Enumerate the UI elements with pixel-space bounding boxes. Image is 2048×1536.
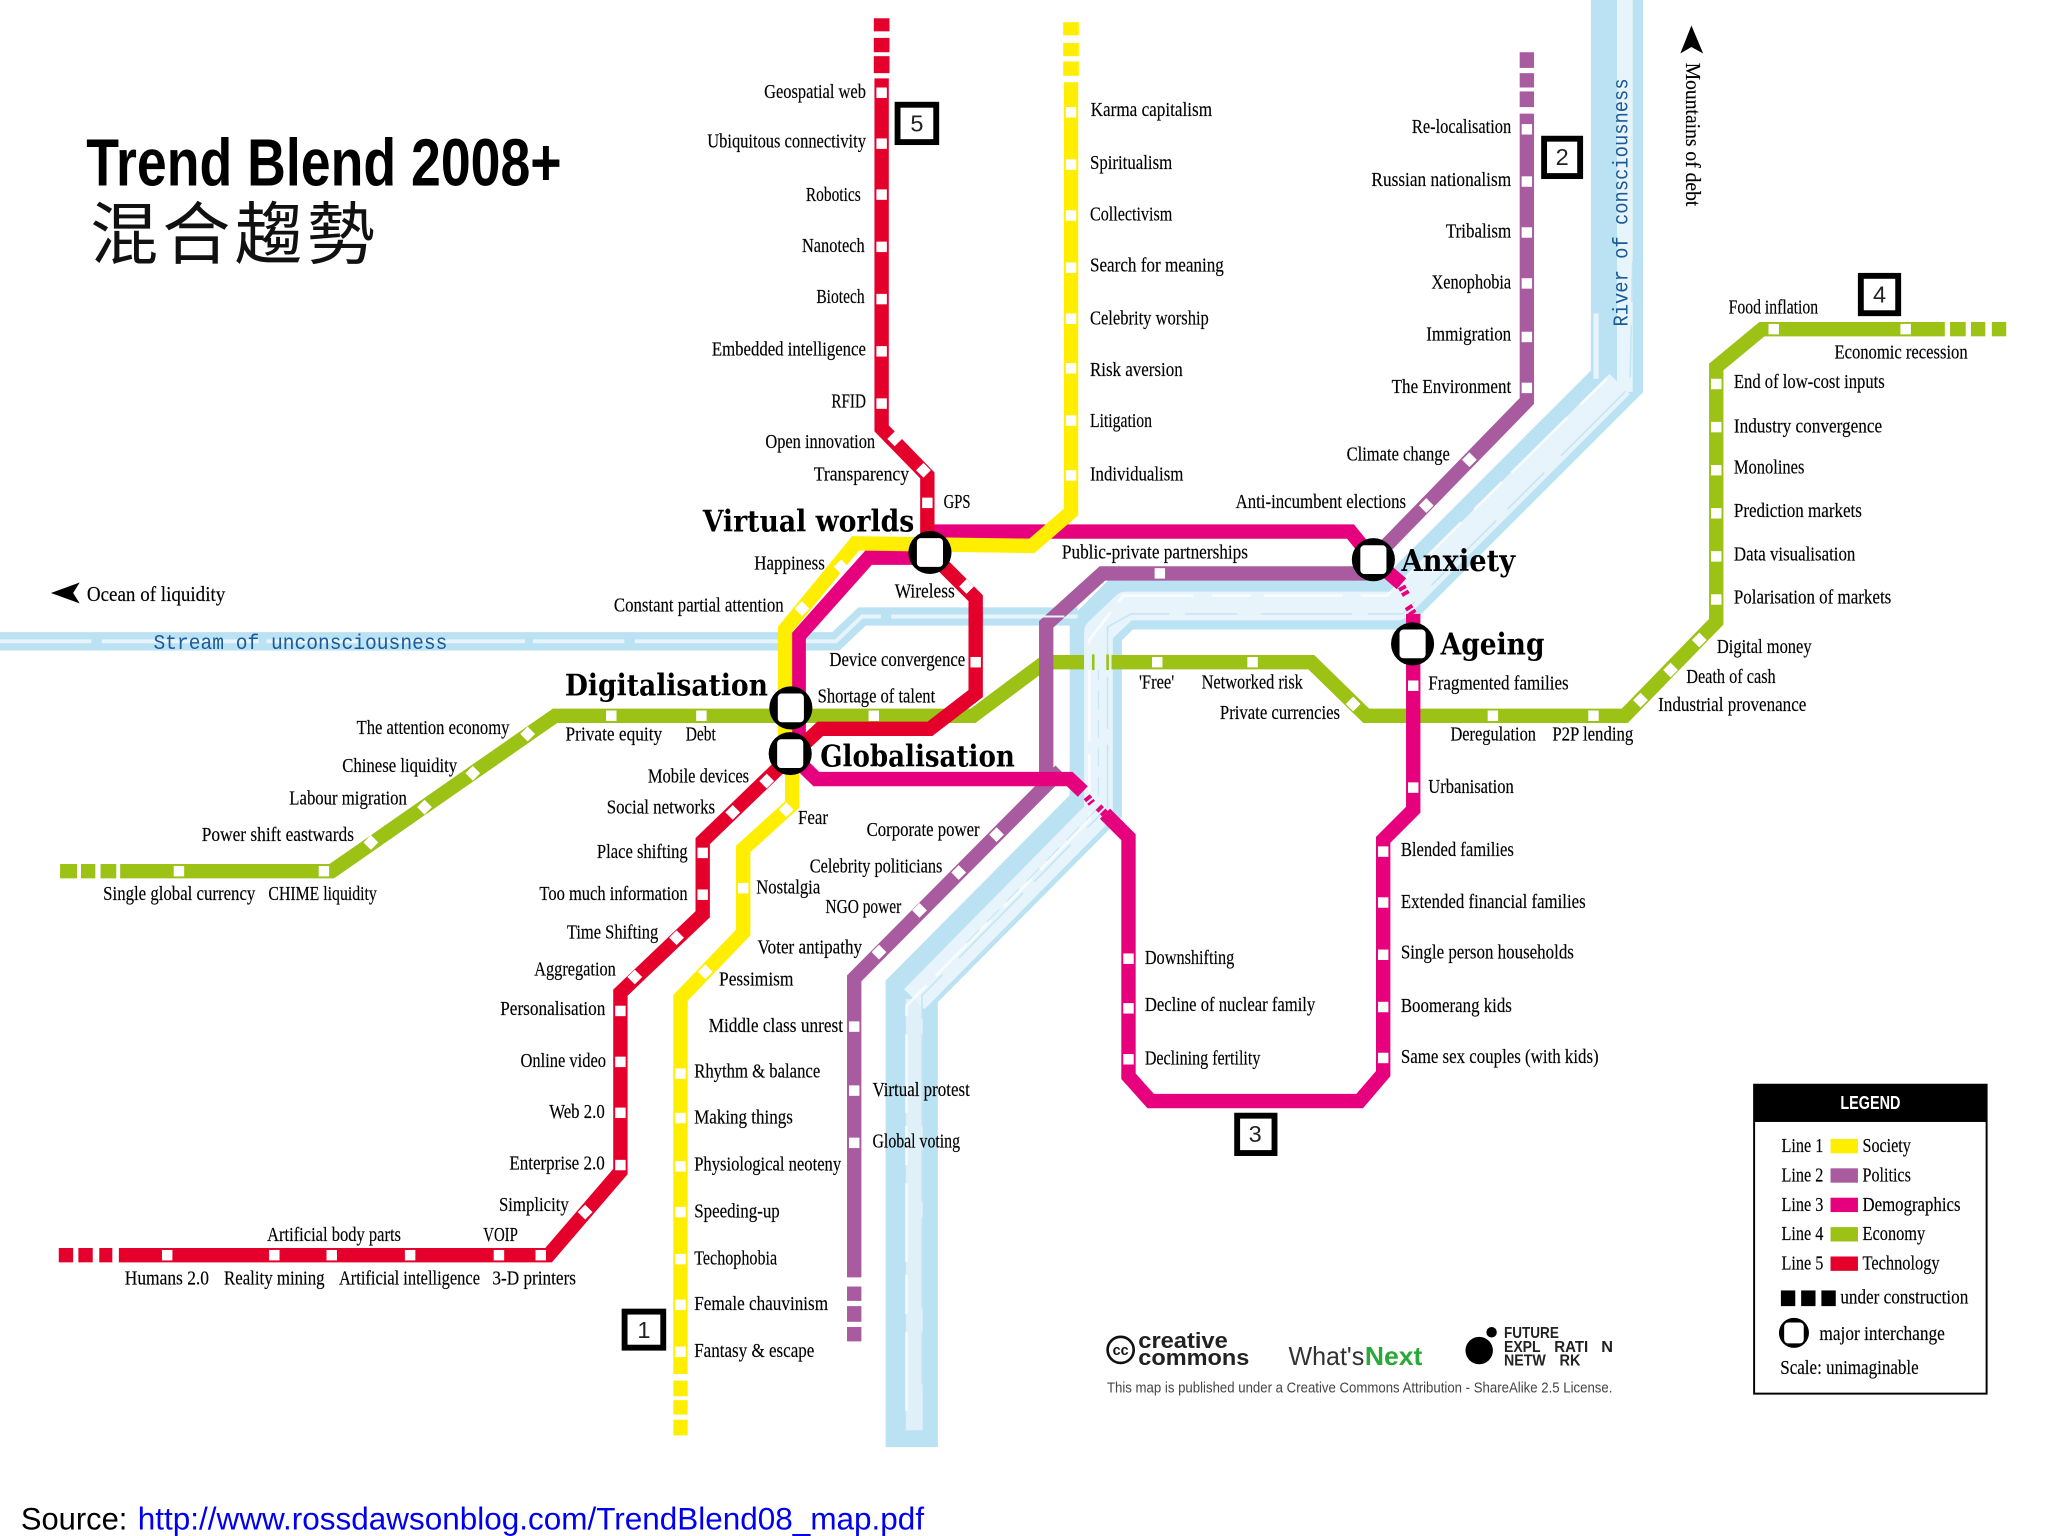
legend rows: Technology: [1863, 1254, 1940, 1275]
what's next logo: [1288, 1341, 1423, 1371]
legend rows: Economy: [1863, 1224, 1925, 1245]
title: [86, 126, 562, 274]
demographics station labels: Same sex couples (with kids): [1401, 1047, 1599, 1068]
society station labels: Litigation: [1090, 411, 1152, 432]
licence note: This map is published under a Creative Commons Attribution - ShareAlike 2.5 License.: [1107, 1380, 1612, 1396]
technology station labels: Too much information: [539, 884, 688, 905]
politics station labels: Virtual protest: [872, 1080, 970, 1101]
demographics station labels: Extended financial families: [1401, 892, 1586, 913]
legend rows: Line 5: [1782, 1254, 1824, 1275]
legend rows: Society: [1863, 1136, 1911, 1157]
politics station labels: The Environment: [1392, 377, 1512, 398]
legend interchange key: major interchange: [1819, 1324, 1945, 1345]
line 3: demographics: [794, 532, 1418, 1101]
society station labels: Search for meaning: [1090, 256, 1224, 277]
economy under-construction dashes: [60, 322, 2006, 878]
economy station labels: Labour migration: [289, 789, 407, 810]
society station labels: Nostalgia: [756, 877, 820, 898]
demographics station labels: Decline of nuclear family: [1145, 995, 1315, 1016]
economy station labels: Private currencies: [1220, 703, 1340, 724]
technology under-construction dashes: [59, 18, 889, 1262]
society station labels: Constant partial attention: [614, 595, 784, 616]
society station labels: Rhythm & balance: [694, 1062, 821, 1083]
future exploration network logo: EXPL: [1504, 1339, 1541, 1356]
society station labels: Individualism: [1090, 465, 1183, 486]
stream foam over politics line: [1036, 615, 1064, 617]
interchange headings: Digitalisation: [565, 669, 768, 704]
legend rows: Line 4: [1782, 1224, 1824, 1245]
demographics station labels: Downshifting: [1145, 948, 1234, 969]
source line: Source:: [21, 1501, 127, 1536]
technology station labels: Web 2.0: [549, 1102, 605, 1123]
society station labels: Karma capitalism: [1091, 100, 1212, 121]
technology station labels: Robotics: [806, 185, 861, 206]
legend rows: Politics: [1863, 1165, 1911, 1186]
demographics river fragments: [1087, 586, 1413, 814]
future exploration network logo: NETW: [1504, 1353, 1546, 1370]
politics station labels: NGO power: [825, 897, 902, 918]
technology station labels: Social networks: [607, 798, 715, 819]
river of consciousness label: River of consciousness: [1611, 78, 1634, 327]
legend interchange key: [1779, 1318, 1945, 1348]
technology station labels: Transparency: [814, 465, 909, 486]
line 1: society: [673, 22, 1079, 1435]
society station labels: Making things: [694, 1107, 793, 1128]
economy station labels: Power shift eastwards: [202, 825, 354, 846]
society station labels: Fear: [798, 808, 828, 829]
economy station labels: Networked risk: [1202, 672, 1303, 693]
legend scale: Scale: unimaginable: [1780, 1358, 1919, 1379]
society track: [680, 82, 1071, 1374]
politics station labels: [709, 117, 1512, 1153]
society station labels: Spiritualism: [1090, 153, 1172, 174]
technology station labels: VOIP: [483, 1225, 518, 1246]
demographics stations: [1123, 680, 1418, 1064]
technology station labels: Aggregation: [534, 960, 616, 981]
demographics station labels: Single person households: [1401, 943, 1574, 964]
demographics station labels: Fragmented families: [1428, 674, 1569, 695]
politics station labels: Corporate power: [867, 820, 980, 841]
politics station labels: Celebrity politicians: [810, 856, 942, 877]
technology station labels: Open innovation: [765, 432, 875, 453]
technology station labels: Wireless: [895, 582, 955, 603]
economy station labels: Chinese liquidity: [342, 756, 457, 777]
legend header: LEGEND: [1840, 1092, 1900, 1113]
demographics station labels: Blended families: [1401, 840, 1514, 861]
title: Trend Blend 2008+: [86, 126, 562, 200]
line number 1: 1: [637, 1317, 650, 1343]
technology station labels: RFID: [831, 392, 866, 413]
future exploration network logo: FUTURE: [1504, 1325, 1559, 1342]
demographics station labels: Boomerang kids: [1401, 996, 1512, 1017]
politics track: [1046, 114, 1527, 778]
title: 混合趨勢: [90, 199, 375, 274]
society station labels: Collectivism: [1090, 205, 1172, 226]
politics station labels: Immigration: [1426, 324, 1511, 345]
line number 5: 5: [910, 110, 923, 136]
technology station labels: Shortage of talent: [818, 687, 936, 708]
economy station labels: Industrial provenance: [1658, 695, 1807, 716]
line number 5: [898, 105, 936, 142]
demographics station labels: Urbanisation: [1428, 777, 1514, 798]
society station labels: Celebrity worship: [1090, 309, 1209, 330]
future exploration network logo: RK: [1560, 1353, 1581, 1370]
line number 3: [1237, 1116, 1275, 1153]
river foam over economy line: [1084, 654, 1112, 670]
demographics station labels: [1145, 674, 1599, 1069]
future exploration network logo: RATI: [1554, 1339, 1588, 1356]
society stations: [675, 107, 1076, 1357]
major interchanges: [769, 531, 1434, 775]
economy station labels: Deregulation: [1450, 725, 1536, 746]
what's next logo: What's: [1288, 1341, 1364, 1371]
politics station labels: Public-private partnerships: [1062, 542, 1248, 563]
line number 3: 3: [1249, 1121, 1262, 1147]
legend under construction key: [1781, 1288, 1968, 1309]
economy station labels: [103, 297, 1968, 905]
technology station labels: Geospatial web: [764, 82, 866, 103]
technology station labels: Humans 2.0: [125, 1269, 209, 1290]
demographics station labels: Declining fertility: [1145, 1048, 1261, 1069]
politics station labels: Tribalism: [1446, 222, 1511, 243]
economy track: [120, 329, 1945, 871]
economy station labels: Digital money: [1717, 637, 1812, 658]
technology station labels: Simplicity: [499, 1195, 569, 1216]
economy station labels: Prediction markets: [1734, 501, 1862, 522]
technology station labels: Mobile devices: [648, 766, 749, 787]
technology station labels: Ubiquitous connectivity: [707, 132, 866, 153]
interchange headings: [565, 505, 1544, 775]
river of consciousness: [906, 0, 1633, 1447]
politics station labels: Middle class unrest: [709, 1016, 844, 1037]
society station labels: Speeding-up: [694, 1201, 780, 1222]
economy station labels: Data visualisation: [1734, 544, 1856, 565]
society station labels: Techophobia: [694, 1248, 777, 1269]
economy station labels: CHIME liquidity: [268, 884, 377, 905]
society station labels: Pessimism: [719, 969, 793, 990]
technology station labels: Nanotech: [802, 236, 865, 257]
line number 2: [1544, 139, 1580, 176]
economy stations: [174, 324, 1911, 876]
technology station labels: Embedded intelligence: [712, 339, 866, 360]
technology station labels: GPS: [944, 492, 970, 513]
society under-construction dashes: [673, 22, 1079, 1435]
legend rows: [1782, 1136, 1960, 1275]
line number 2: 2: [1556, 144, 1569, 170]
line number 1: [625, 1312, 663, 1348]
economy station labels: Industry convergence: [1734, 416, 1882, 437]
society station labels: [614, 100, 1224, 1362]
technology station labels: Online video: [520, 1051, 606, 1072]
source line: http://www.rossdawsonblog.com/TrendBlend08_map.pdf: [138, 1501, 924, 1536]
legend: [1753, 1084, 1987, 1394]
politics station labels: Anti-incumbent elections: [1236, 492, 1406, 513]
society station labels: Risk aversion: [1090, 360, 1183, 381]
technology station labels: Artificial intelligence: [339, 1269, 480, 1290]
line 4: economy: [60, 322, 2006, 878]
legend under construction key: under construction: [1840, 1288, 1968, 1309]
legend rows: Demographics: [1863, 1195, 1960, 1216]
technology station labels: Artificial body parts: [267, 1225, 401, 1246]
technology station labels: Enterprise 2.0: [509, 1154, 605, 1175]
politics station labels: Voter antipathy: [758, 937, 862, 958]
demographics track: [799, 558, 930, 744]
future exploration network logo: N: [1601, 1339, 1613, 1356]
legend rows: Line 3: [1782, 1195, 1824, 1216]
technology station labels: Reality mining: [224, 1269, 325, 1290]
legend header: [1753, 1084, 1987, 1122]
economy station labels: Death of cash: [1686, 667, 1776, 688]
politics under-construction dashes: [847, 52, 1534, 1341]
technology stations: [162, 88, 981, 1260]
politics station labels: Global voting: [872, 1132, 960, 1153]
what's next logo: Next: [1365, 1341, 1423, 1371]
future exploration network logo: [1465, 1325, 1613, 1370]
politics station labels: Russian nationalism: [1371, 170, 1511, 191]
stream of unconsciousness label: Stream of unconsciousness: [153, 633, 447, 656]
creative commons logo: cc: [1113, 1343, 1129, 1359]
line number 4: 4: [1873, 281, 1886, 307]
politics station labels: Climate change: [1347, 444, 1450, 465]
economy station labels: Private equity: [566, 725, 662, 746]
society station labels: Happiness: [754, 553, 825, 574]
legend rows: Line 2: [1782, 1165, 1823, 1186]
stream of unconsciousness: [0, 616, 1078, 641]
economy station labels: The attention economy: [357, 718, 510, 739]
creative commons logo: [1108, 1328, 1249, 1370]
interchange headings: Ageing: [1440, 627, 1544, 662]
technology track: [882, 78, 927, 542]
technology station labels: Device convergence: [829, 650, 965, 671]
economy station labels: Polarisation of markets: [1734, 587, 1891, 608]
economy station labels: Debt: [686, 725, 716, 746]
politics station labels: Xenophobia: [1432, 273, 1511, 294]
economy station labels: End of low-cost inputs: [1734, 372, 1885, 393]
economy station labels: Economic recession: [1834, 343, 1968, 364]
technology station labels: [125, 82, 970, 1290]
society station labels: Fantasy & escape: [694, 1341, 815, 1362]
line number 4: [1861, 276, 1898, 313]
economy station labels: 'Free': [1139, 672, 1174, 693]
interchange headings: Virtual worlds: [702, 505, 914, 540]
technology station labels: Personalisation: [500, 999, 606, 1020]
politics stations: [849, 124, 1532, 1148]
creative commons logo: commons: [1138, 1345, 1249, 1370]
mountains of debt label with arrow: Mountains of debt: [1681, 63, 1705, 207]
technology station labels: Place shifting: [597, 842, 688, 863]
legend rows: Line 1: [1782, 1136, 1823, 1157]
interchange headings: Anxiety: [1401, 544, 1516, 579]
interchange headings: Globalisation: [820, 740, 1015, 775]
technology station labels: Time Shifting: [567, 922, 658, 943]
society station labels: Physiological neoteny: [694, 1154, 841, 1175]
economy station labels: Single global currency: [103, 884, 256, 905]
technology station labels: 3-D printers: [492, 1269, 576, 1290]
economy station labels: P2P lending: [1552, 725, 1633, 746]
economy station labels: Monolines: [1734, 458, 1804, 479]
line 2: politics: [847, 52, 1534, 1341]
creative commons logo: creative: [1138, 1328, 1228, 1353]
technology station labels: Biotech: [816, 287, 865, 308]
economy station labels: Food inflation: [1729, 297, 1818, 318]
society station labels: Female chauvinism: [694, 1294, 828, 1315]
ocean of liquidity label with arrow: Ocean of liquidity: [87, 582, 226, 606]
politics station labels: Re-localisation: [1412, 117, 1511, 138]
line 5: technology: [59, 18, 981, 1262]
